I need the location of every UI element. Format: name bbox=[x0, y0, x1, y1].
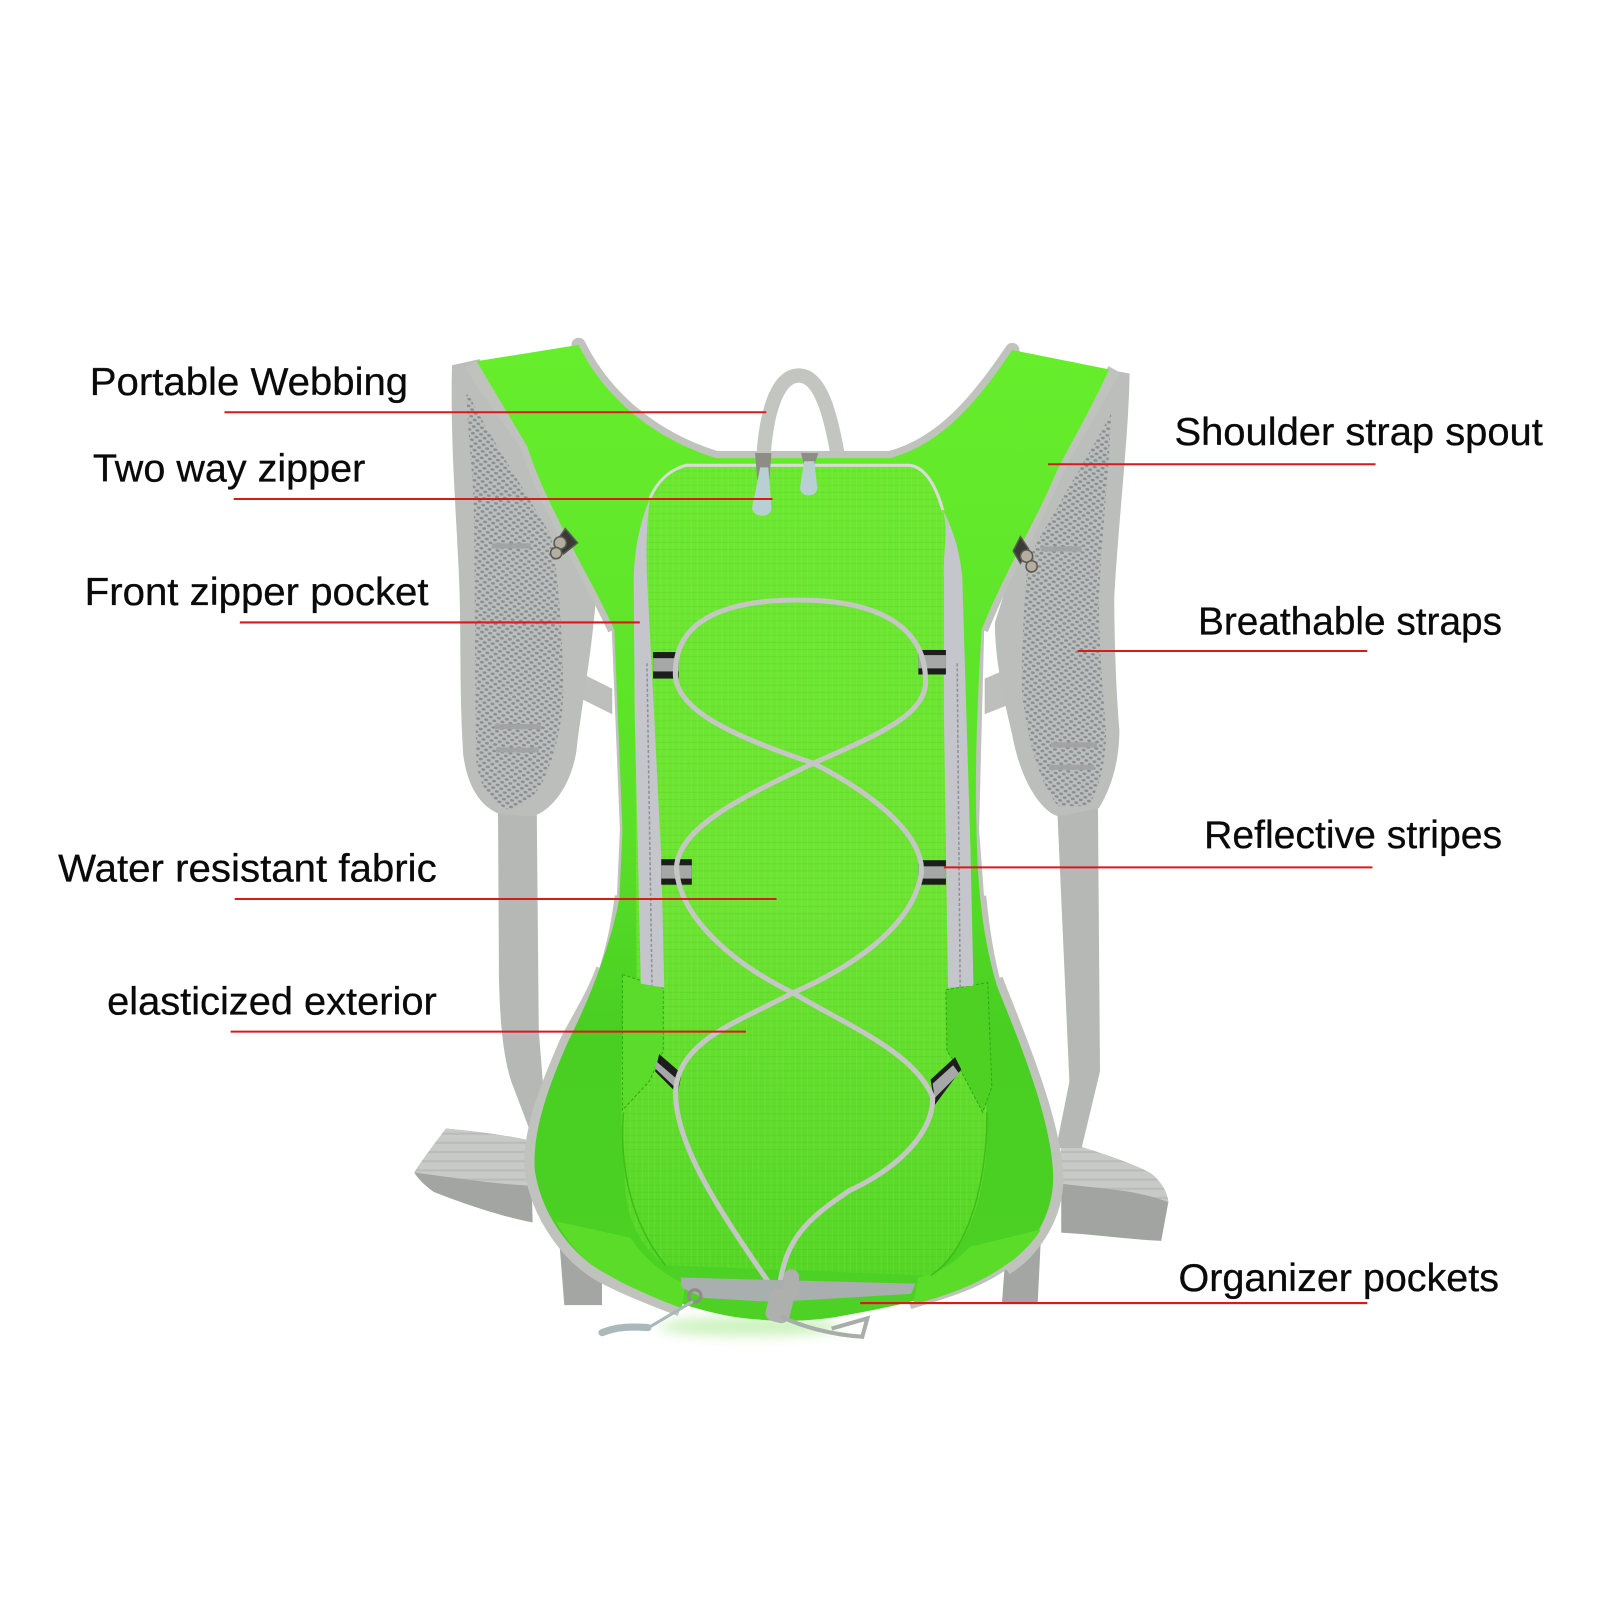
lower right tab bbox=[1002, 1240, 1041, 1302]
front panel bbox=[621, 465, 987, 1276]
left hip belt bbox=[414, 1129, 533, 1222]
label: Water resistant fabric: Water resistant fabric bbox=[58, 848, 437, 891]
lower panel seam bbox=[623, 1112, 987, 1276]
right hip belt bbox=[1061, 1141, 1168, 1241]
label: Shoulder strap spout: Shoulder strap spout bbox=[1174, 411, 1543, 454]
cord tail loop bbox=[781, 1316, 867, 1337]
fabric weave bbox=[621, 465, 987, 1276]
label: Two way zipper: Two way zipper bbox=[93, 448, 365, 491]
label: Front zipper pocket: Front zipper pocket bbox=[85, 571, 429, 614]
label: Portable Webbing: Portable Webbing bbox=[90, 361, 408, 404]
leader: shoulder strap spout bbox=[1048, 463, 1376, 465]
label: Organizer pockets: Organizer pockets bbox=[1179, 1257, 1499, 1300]
leader: organizer pockets bbox=[860, 1302, 1367, 1304]
handle webbing bbox=[763, 376, 839, 461]
two way zipper pulls bbox=[752, 453, 818, 516]
left shoulder pad bbox=[452, 359, 597, 816]
side pockets bbox=[622, 974, 992, 1112]
leader: reflective stripes bbox=[944, 866, 1372, 868]
hanging zipper pull bbox=[602, 1290, 701, 1333]
leader: front zipper pocket bbox=[240, 621, 640, 623]
right shoulder pad bbox=[995, 369, 1130, 816]
cord stopper bbox=[764, 1269, 799, 1325]
lower left tab bbox=[559, 1240, 602, 1305]
body gray piping bbox=[471, 345, 1114, 1308]
right adjuster buckle bbox=[1013, 537, 1037, 572]
small connector straps bbox=[571, 663, 1020, 714]
reflective stripes bbox=[653, 650, 961, 1105]
label: elasticized exterior: elasticized exterior bbox=[107, 980, 437, 1023]
left vertical strap bbox=[498, 806, 556, 1133]
leader: breathable straps bbox=[1078, 650, 1367, 652]
label: Reflective stripes: Reflective stripes bbox=[1204, 814, 1502, 857]
zipper trim around front pocket bbox=[634, 465, 973, 988]
leader: elasticized exterior bbox=[231, 1031, 746, 1033]
leader: water resistant fabric bbox=[235, 898, 777, 900]
organizer pocket zipper bbox=[681, 1278, 915, 1302]
lower corner panels bbox=[556, 1221, 1041, 1308]
label: Breathable straps: Breathable straps bbox=[1198, 601, 1502, 644]
left adjuster buckle bbox=[551, 529, 578, 559]
backpack illustration bbox=[414, 345, 1168, 1337]
leader: portable webbing bbox=[224, 411, 766, 413]
right vertical strap bbox=[1056, 806, 1100, 1148]
body fabric bbox=[477, 345, 1109, 1321]
elastic cord bbox=[675, 600, 933, 1288]
ground glow bbox=[658, 1317, 842, 1336]
leader: two way zipper bbox=[234, 498, 772, 500]
